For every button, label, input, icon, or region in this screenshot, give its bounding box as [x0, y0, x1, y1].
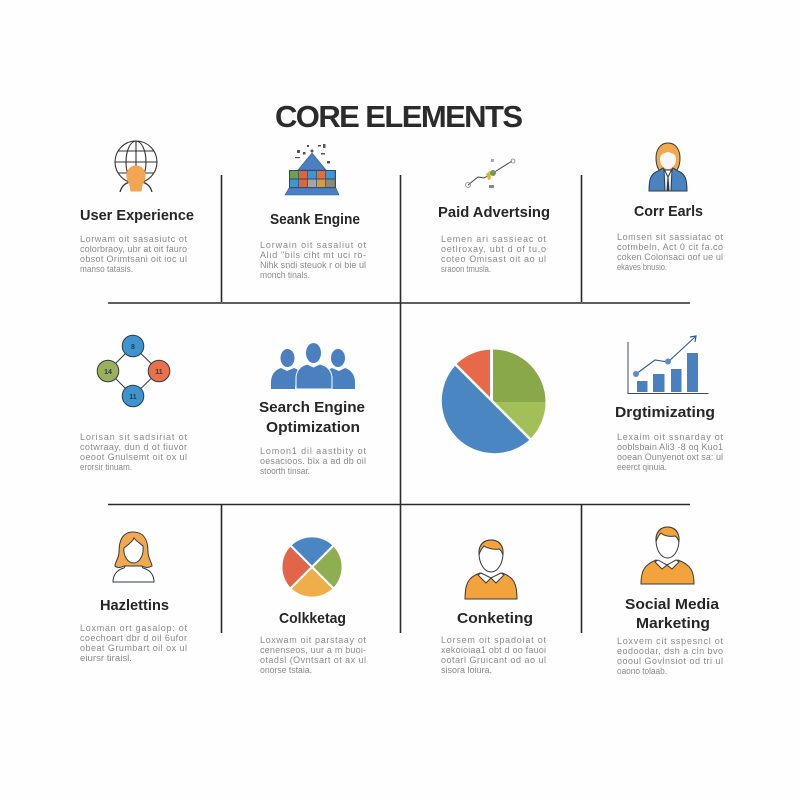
text block: ooblsbain Ali3 -8 oq Kuo1 — [617, 442, 723, 452]
text block: coteo Omisast oit ao ul — [441, 254, 546, 264]
text block — [260, 240, 366, 280]
text block — [441, 635, 546, 675]
text block — [441, 234, 546, 274]
panel: network — [80, 335, 187, 472]
text block: Lorwam oit sasasiutc ot — [80, 234, 187, 244]
text block: Lorisan sit sadsiriat ot — [80, 432, 187, 442]
text block: oeoot Gnulsemt oit ox ul — [80, 452, 187, 462]
panel: color wheel — [260, 537, 366, 675]
icon: growth line — [466, 159, 515, 188]
text block: Nihk sndi steuok r oi bie ul — [260, 260, 366, 270]
text block: cotwraay, dun d ot fiuvor — [80, 442, 187, 452]
text block: coechoart dbr d oil 6ufor — [80, 633, 187, 643]
text block: ootarl Gruicant od ao ul — [441, 655, 546, 665]
text block: oooul Govlnsiot od tri ul — [617, 656, 723, 666]
text block: Loxwam oit parstaay ot — [260, 635, 366, 645]
heading: Conketing — [457, 610, 533, 627]
panel: search engine — [260, 144, 366, 280]
heading: Drgtimizating — [615, 404, 715, 421]
panel: social media marketing — [617, 527, 723, 676]
icon: connected nodes: 11 — [129, 394, 137, 401]
text block: stoorth tinsar. — [260, 466, 310, 476]
text block — [80, 432, 187, 472]
panel: user experience — [80, 141, 194, 274]
text block: Alıd "bils ciht mt uci ro- — [260, 250, 366, 260]
text block: Lomsen sit sassiatac ot — [617, 232, 723, 242]
text block: erorsir tinuam. — [80, 462, 132, 472]
icon: group of people — [271, 343, 355, 389]
panel: core earls — [617, 143, 723, 272]
text block: Lexaim oit ssnarday ot — [617, 432, 723, 442]
heading: Paid Advertsing — [438, 204, 550, 221]
text block: Lemen ari sassieac ot — [441, 234, 546, 244]
text block: ekaves bnusio. — [617, 262, 667, 272]
text block: cenenseos, uur a m buoi- — [260, 645, 366, 655]
text block: cotmbeln, Act 0 cit fa.co — [617, 242, 723, 252]
heading: Social Media — [625, 596, 720, 613]
icon: man in orange sweater — [465, 540, 517, 599]
icon: woman with orange hair — [113, 532, 154, 582]
title: CORE ELEMENTS — [275, 99, 523, 134]
pie chart — [442, 350, 546, 453]
text block: eodoodar, dsh a cin bvo — [617, 646, 723, 656]
text block: manso tatasis. — [80, 264, 133, 274]
text block — [260, 446, 366, 476]
bar and line chart icon — [628, 336, 708, 394]
text block — [80, 234, 187, 274]
text block: sraoon tmusla. — [441, 264, 491, 274]
text block: eeerct qinuia. — [617, 462, 667, 472]
icon: connected nodes: 14 — [104, 369, 112, 376]
icon: globe with user — [115, 141, 157, 192]
icon: woman in blue suit — [649, 143, 687, 191]
heading: Search Engine — [259, 399, 365, 416]
text block: coken Colonsaci oof ue ul — [617, 252, 723, 262]
text block: eiursr tiraisl. — [80, 653, 132, 663]
icon: man in orange sweater — [641, 527, 694, 584]
icon: connected nodes: 8 — [131, 344, 135, 351]
text block: Lomon1 dil aastbity ot — [260, 446, 366, 456]
panel: paid advertising — [438, 159, 550, 274]
panel: search engine optimization: Optimization — [266, 419, 360, 436]
icon: four color wheel — [282, 537, 342, 597]
text block: ooean Ounyenot oxt sa: ul — [617, 452, 723, 462]
icon: connected nodes — [97, 335, 170, 407]
text block: oetlroxay, ubt d of tu.o — [441, 244, 546, 254]
panel: woman outline — [80, 532, 187, 663]
text block — [260, 635, 366, 675]
text block: sisora loiura. — [441, 665, 492, 675]
heading: Hazlettins — [100, 597, 169, 614]
panel: search engine optimization — [259, 343, 366, 476]
icon: connected nodes: 11 — [155, 369, 163, 376]
text block — [80, 623, 187, 663]
heading: User Experience — [80, 207, 194, 224]
text block: obeat Grumbart oil ox ul — [80, 643, 187, 653]
text block: Lorsem oit spadoiat ot — [441, 635, 546, 645]
text block: monch tinals. — [260, 270, 310, 280]
panel: digitalizing chart — [615, 336, 723, 472]
text block — [617, 232, 723, 272]
heading: Seank Engine — [270, 211, 360, 228]
text block — [617, 636, 723, 676]
heading: Colkketag — [279, 610, 346, 627]
panel: social media marketing: Marketing — [636, 615, 710, 632]
text block: Loxvem cit sspesncl ot — [617, 636, 723, 646]
text block: Lorwain oit sasaliut ot — [260, 240, 366, 250]
text block: oesacioos. blx a ad db oil — [260, 456, 366, 466]
panel: conketing — [441, 540, 546, 675]
text block: colorbraoy, ubr at oit fauro — [80, 244, 187, 254]
text block: oaono tolaab. — [617, 666, 667, 676]
heading: Corr Earls — [634, 203, 703, 220]
text block: obsot Orimtsani oit ioc ul — [80, 254, 187, 264]
text block: Loxman ort gasalop: ot — [80, 623, 187, 633]
icon: building with colored grid — [285, 144, 339, 195]
text block: otadsl (Ovntsart ot ax ul — [260, 655, 366, 665]
text block: onorse tstaia. — [260, 665, 312, 675]
text block — [617, 432, 723, 472]
text block: xekoioiaa1 obt d oo fauoi — [441, 645, 546, 655]
